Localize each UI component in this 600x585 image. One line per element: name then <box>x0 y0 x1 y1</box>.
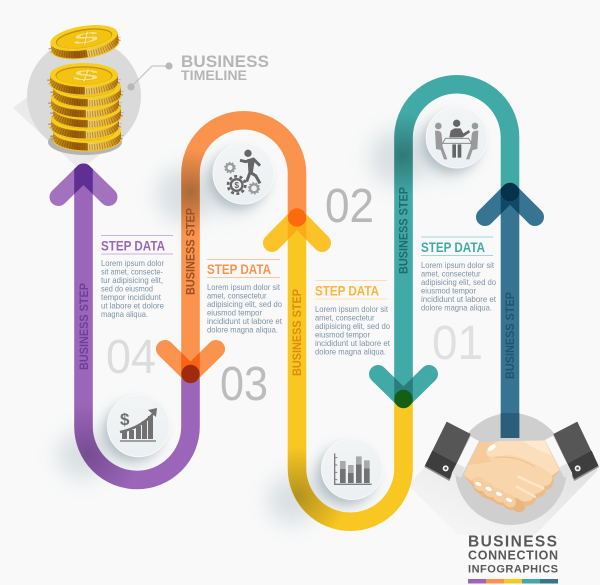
text block: orange step data: amet, consectetur <box>207 290 267 300</box>
text block: purple step data: Lorem ipsum dolor <box>101 258 164 268</box>
band: teal step 01 <box>404 84 510 399</box>
icon: gold coin stack <box>48 21 122 155</box>
text block: teal step data: adipisicing elit, sed do <box>421 277 496 287</box>
step numbers: 02 <box>325 180 374 233</box>
text block: orange step data <box>207 260 283 334</box>
text block: yellow step data: eiusmod tempor <box>315 330 370 340</box>
arrow: blue <box>485 183 535 217</box>
text block: purple step data: tempor incididunt <box>101 292 162 302</box>
text block: purple step data: sed do eiusmod <box>101 284 153 294</box>
text block: orange step data: adipisicing elit, sed do <box>207 299 282 309</box>
text block: teal step data: amet, consectetur <box>421 268 481 278</box>
arrow: yellow <box>272 208 322 243</box>
text block: orange step data: eiusmod tempor <box>207 308 262 318</box>
coin backdrop circle <box>27 39 141 153</box>
text block: yellow step data: amet, consectetur <box>315 312 375 322</box>
icon: investment growth circle <box>104 395 170 461</box>
cuffs <box>452 436 572 478</box>
text block: purple step data: STEP DATA <box>101 238 165 254</box>
text block: yellow step data: incididunt ut labore et <box>315 338 391 348</box>
title: business connection infographics: BUSINESS <box>468 534 557 550</box>
coin stack shadow <box>48 129 122 155</box>
text block: yellow step data: dolore magna aliqua. <box>315 346 386 356</box>
step numbers: 03 <box>220 358 268 411</box>
vertical labels: BUSINESS STEP <box>290 289 304 376</box>
vertical labels: BUSINESS STEP <box>184 208 198 295</box>
icon: runner and gears circle <box>209 143 274 209</box>
step numbers: 04 <box>106 331 156 384</box>
runner <box>244 150 252 157</box>
text block: orange step data: Lorem ipsum dolor sit <box>207 282 281 292</box>
icon: investment growth circle: $ <box>120 410 130 429</box>
text block: purple step data: tur adipisicing elit, <box>101 275 163 285</box>
text block: yellow step data: adipisicing elit, sed do <box>315 321 390 331</box>
text block: orange step data: STEP DATA <box>207 261 271 277</box>
title: business connection infographics: CONNECTION <box>468 548 558 562</box>
hands <box>463 440 560 515</box>
step numbers <box>106 180 483 411</box>
left sleeve <box>424 422 471 481</box>
band: blue start <box>501 192 519 438</box>
right sleeve <box>553 422 599 481</box>
arrow: orange <box>165 349 216 383</box>
flying coin: $ <box>71 27 101 49</box>
title: business connection infographics <box>468 534 558 576</box>
title: business timeline: BUSINESS <box>181 52 269 71</box>
band: yellow step 02 <box>297 217 404 522</box>
text block: teal step data <box>421 237 497 312</box>
text block: teal step data: incididunt ut labore et <box>421 294 497 304</box>
text block: yellow step data <box>315 280 391 356</box>
vertical labels: BUSINESS STEP <box>503 292 517 379</box>
title: business timeline: TIMELINE <box>181 67 247 83</box>
soft shadows under the bands <box>58 123 472 524</box>
main gear <box>230 178 244 192</box>
text block: teal step data: STEP DATA <box>421 239 485 255</box>
connector line <box>127 62 173 91</box>
small right gear <box>250 184 258 192</box>
title: business connection infographics: INFOGRAPHICS <box>468 564 558 576</box>
handshake long shadow <box>408 440 598 535</box>
small left gear <box>226 164 234 171</box>
vertical labels: BUSINESS STEP <box>396 187 410 274</box>
text block: purple step data: sit amet, consecte- <box>101 266 163 276</box>
vertical labels: BUSINESS STEP <box>77 283 91 370</box>
text block: teal step data: dolore magna aliqua. <box>421 302 492 312</box>
band: orange step 03 <box>190 120 297 374</box>
handshake backdrop circle <box>455 413 567 525</box>
arrow: teal <box>378 374 429 408</box>
text block: orange step data: dolore magna aliqua. <box>207 324 278 334</box>
text block: teal step data: Lorem ipsum dolor sit <box>421 260 495 270</box>
text block: purple step data <box>101 236 173 319</box>
icon: bar chart circle <box>317 438 382 505</box>
arrow: purple <box>58 172 108 197</box>
vertical labels <box>77 187 517 379</box>
icon: handshake <box>424 422 599 515</box>
icon: gold coin stack: $ <box>69 67 103 84</box>
text block: yellow step data: Lorem ipsum dolor sit <box>315 304 389 314</box>
coin long shadow <box>13 78 118 170</box>
text block: orange step data: incididunt ut labore et <box>207 316 283 326</box>
text block: purple step data: ut labore et dolore <box>101 300 164 310</box>
title: business timeline <box>181 52 269 83</box>
icon: runner and gears circle: $ <box>234 180 239 190</box>
icon: meeting table circle <box>422 107 487 173</box>
band: purple step 04 <box>84 172 190 480</box>
text block: teal step data: eiusmod tempor <box>421 286 476 296</box>
text block: yellow step data: STEP DATA <box>315 282 379 298</box>
step numbers: 01 <box>432 317 483 370</box>
text block: purple step data: magna aliqua. <box>101 309 148 319</box>
colour legend bar <box>468 579 558 584</box>
